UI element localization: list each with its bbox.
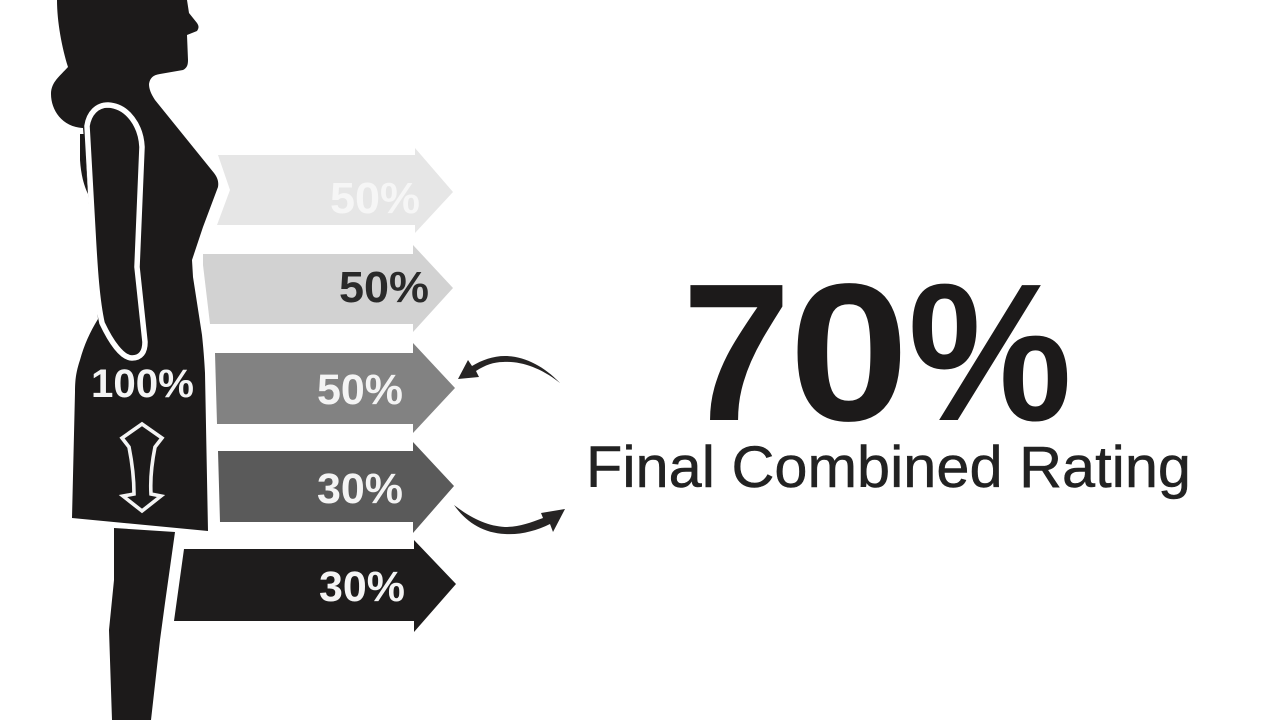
arrow: curved pointer toward rating <box>454 505 565 534</box>
arrow: 50% lightest <box>217 148 453 233</box>
silhouette: head and torso <box>51 0 218 531</box>
icon: double-headed vertical arrow <box>122 424 162 511</box>
figure: woman silhouette <box>51 0 218 720</box>
arrow: 50% lightest: 50% <box>330 174 420 223</box>
arrow: 30% dark grey <box>218 442 454 533</box>
silhouette: arm with white outline <box>87 105 145 358</box>
silhouette: leg <box>109 528 175 720</box>
arrow: 50% light: 50% <box>339 263 429 312</box>
headline: 70%: % <box>908 243 1072 462</box>
chart: stacked percentage arrows <box>174 148 456 632</box>
arrow: curved pointer to 50% arrow <box>458 356 560 383</box>
headline: 70%: 0 <box>789 243 909 462</box>
label: 100%: 100% <box>91 362 194 406</box>
headline: 70%: 7 <box>682 243 791 462</box>
arrow: 50% mid grey: 50% <box>317 366 403 414</box>
silhouette: rear sliver of back <box>80 134 88 194</box>
arrow: 30% dark grey: 30% <box>317 465 403 513</box>
arrow: 50% light <box>203 245 453 332</box>
arrow: 50% mid grey <box>215 343 455 433</box>
subtitle: Final Combined Rating: Final Combined Rating <box>586 435 1191 500</box>
arrow: 30% black <box>174 540 456 632</box>
arrow: 30% black: 30% <box>319 563 405 611</box>
